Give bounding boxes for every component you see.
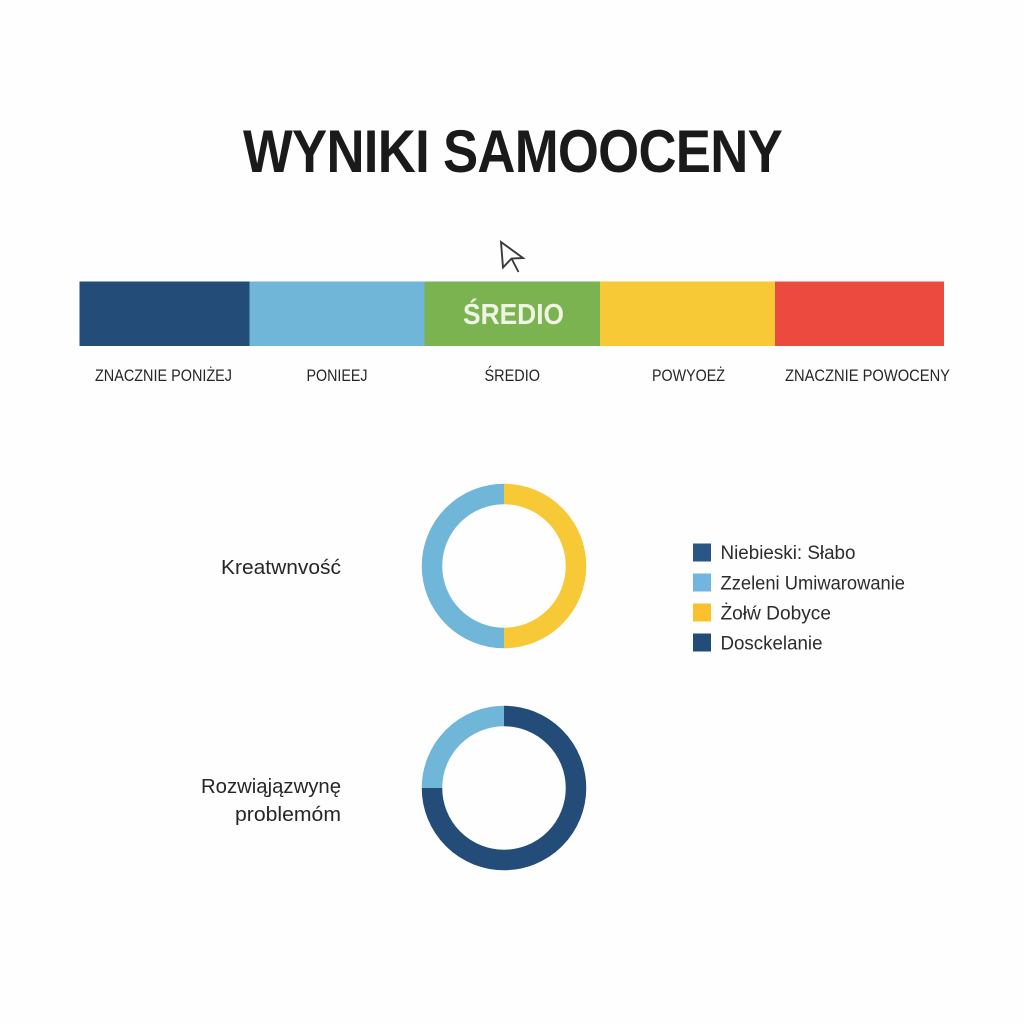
segment: above	[600, 282, 775, 346]
segment: average	[424, 282, 600, 346]
scale labels	[95, 366, 950, 385]
label: creativity: Kreatwnvość	[221, 556, 341, 579]
legend item: excellence: Dosckelanie	[720, 634, 822, 654]
donut: creativity	[432, 494, 576, 638]
icon: cursor arrow	[501, 242, 523, 272]
label: average: ŚREDIO	[484, 366, 540, 385]
active segment label: ŚREDIO	[463, 297, 564, 331]
legend item: good: Żołẃ Dobyce	[720, 604, 831, 624]
label: well above: ZNACZNIE POWOCENY	[785, 367, 950, 385]
label: problem solving: Rozwiąjązwynę	[201, 775, 341, 798]
label: above: POWYOEŻ	[652, 366, 725, 385]
segment: below	[250, 282, 424, 346]
label: problem solving: problemóm	[235, 803, 341, 826]
legend item: skills: Zzeleni Umiwarowanie	[720, 574, 905, 594]
segment: well above	[775, 282, 944, 346]
label: well below: ZNACZNIE PONIŻEJ	[95, 366, 232, 385]
donut: problem solving	[432, 716, 576, 860]
segment: well below	[80, 282, 250, 346]
legend item: weak: Niebieski: Słabo	[720, 543, 856, 564]
title: WYNIKI SAMOOCENY	[243, 118, 783, 185]
scale bar	[80, 282, 944, 346]
label: problem solving	[201, 775, 341, 826]
label: below: PONIEEJ	[306, 367, 368, 385]
legend	[693, 543, 905, 654]
